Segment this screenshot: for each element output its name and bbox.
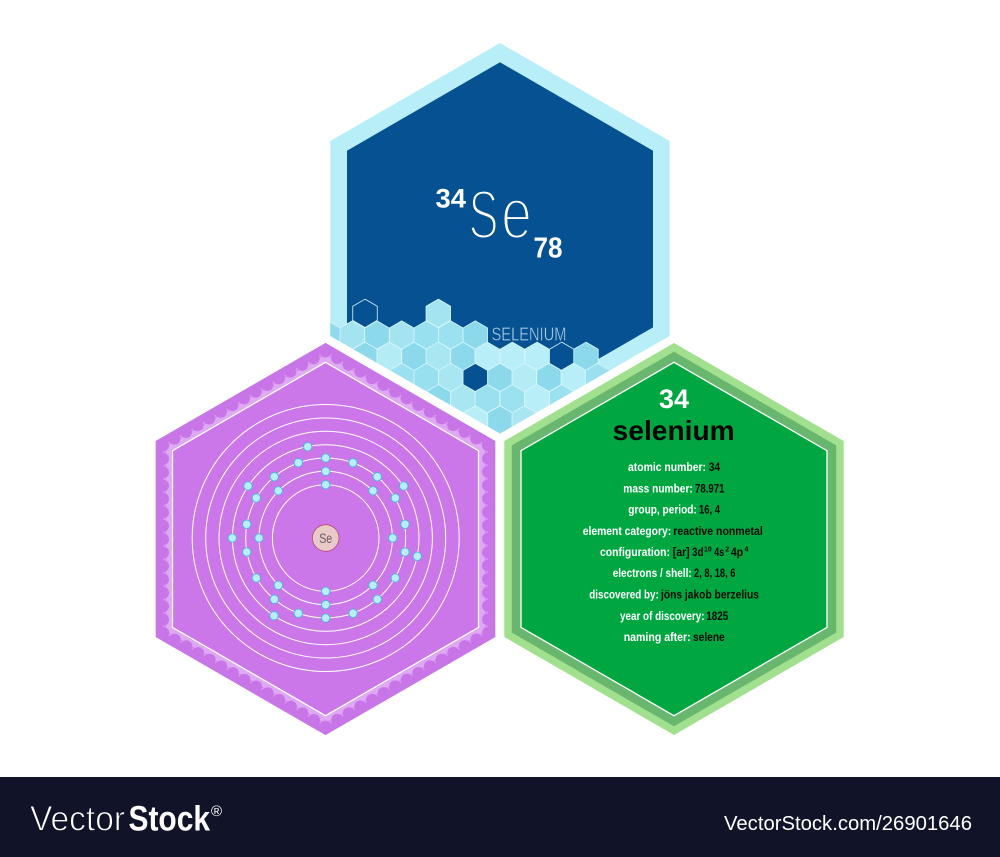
logo: VectorStock: ®: [211, 803, 222, 820]
fact: electrons per shell: electrons / shell:: [613, 566, 692, 580]
fact: naming origin: selene: [693, 630, 725, 644]
middle border: [512, 352, 836, 726]
electrons: [228, 442, 421, 622]
panel: left hexagon, atom diagram: [156, 343, 495, 735]
element symbol: [468, 174, 532, 254]
fact: mass number: mass number:: [623, 482, 693, 496]
fact: configuration: [600, 545, 748, 559]
fact: element category: reactive nonmetal: [673, 524, 763, 538]
fact: electrons per shell: 2, 8, 18, 6: [694, 566, 736, 580]
fact: element category: [583, 524, 763, 538]
logo: VectorStock: Vector: [30, 800, 125, 839]
footer bar: [0, 777, 1000, 857]
hexagon face: [172, 362, 478, 716]
mass number: 78: [534, 233, 562, 265]
honeycomb pattern: [316, 299, 610, 434]
element name: SELENIUM: [492, 325, 566, 345]
hexagon face: [347, 62, 653, 416]
fact: configuration: 4s: [714, 545, 725, 559]
element symbol: S: [468, 176, 498, 254]
nucleus: [312, 525, 339, 551]
logo: VectorStock: [30, 800, 222, 839]
atomic number: 34: [436, 183, 466, 213]
fact: element category: element category:: [583, 524, 671, 538]
fact: atomic number: 34: [709, 460, 720, 474]
fact: group and period: group, period:: [628, 502, 697, 516]
panel: top hexagon, element symbol: [316, 43, 670, 434]
hexagon face: [521, 362, 827, 716]
fact: year of discovery: year of discovery:: [620, 609, 704, 623]
outer border: [504, 343, 844, 735]
fact: configuration: 4: [744, 546, 748, 554]
fact: discoverer: [589, 588, 759, 602]
fact: configuration: 3d: [692, 545, 704, 559]
fact: atomic number: atomic number:: [628, 460, 706, 474]
fact: configuration: 10: [704, 546, 712, 554]
hexagon border: [330, 43, 670, 434]
fact: configuration: configuration:: [600, 545, 670, 559]
fact: configuration: 2: [725, 546, 729, 554]
fact: group and period: 16, 4: [699, 502, 720, 516]
fact: year of discovery: 1825: [706, 609, 729, 623]
element name heading: selenium: [613, 415, 735, 446]
electron shells: [192, 404, 459, 672]
element symbol: e: [501, 174, 532, 254]
image id: VectorStock.com/26901646: [724, 813, 972, 835]
atomic number heading: 34: [659, 384, 689, 414]
fact: configuration: [ar]: [673, 545, 690, 559]
fact: discoverer: jöns jakob berzelius: [660, 588, 759, 602]
logo: VectorStock: Stock: [128, 800, 210, 839]
fact: configuration: 4p: [731, 545, 743, 559]
hexagon scalloped border: [156, 343, 495, 735]
fact: mass number: 78.971: [695, 482, 725, 496]
fact: naming origin: naming after:: [624, 630, 691, 644]
panel: right hexagon, element facts: [504, 343, 844, 735]
nucleus: Se: [319, 530, 332, 546]
fact: discoverer: discovered by:: [589, 588, 659, 602]
